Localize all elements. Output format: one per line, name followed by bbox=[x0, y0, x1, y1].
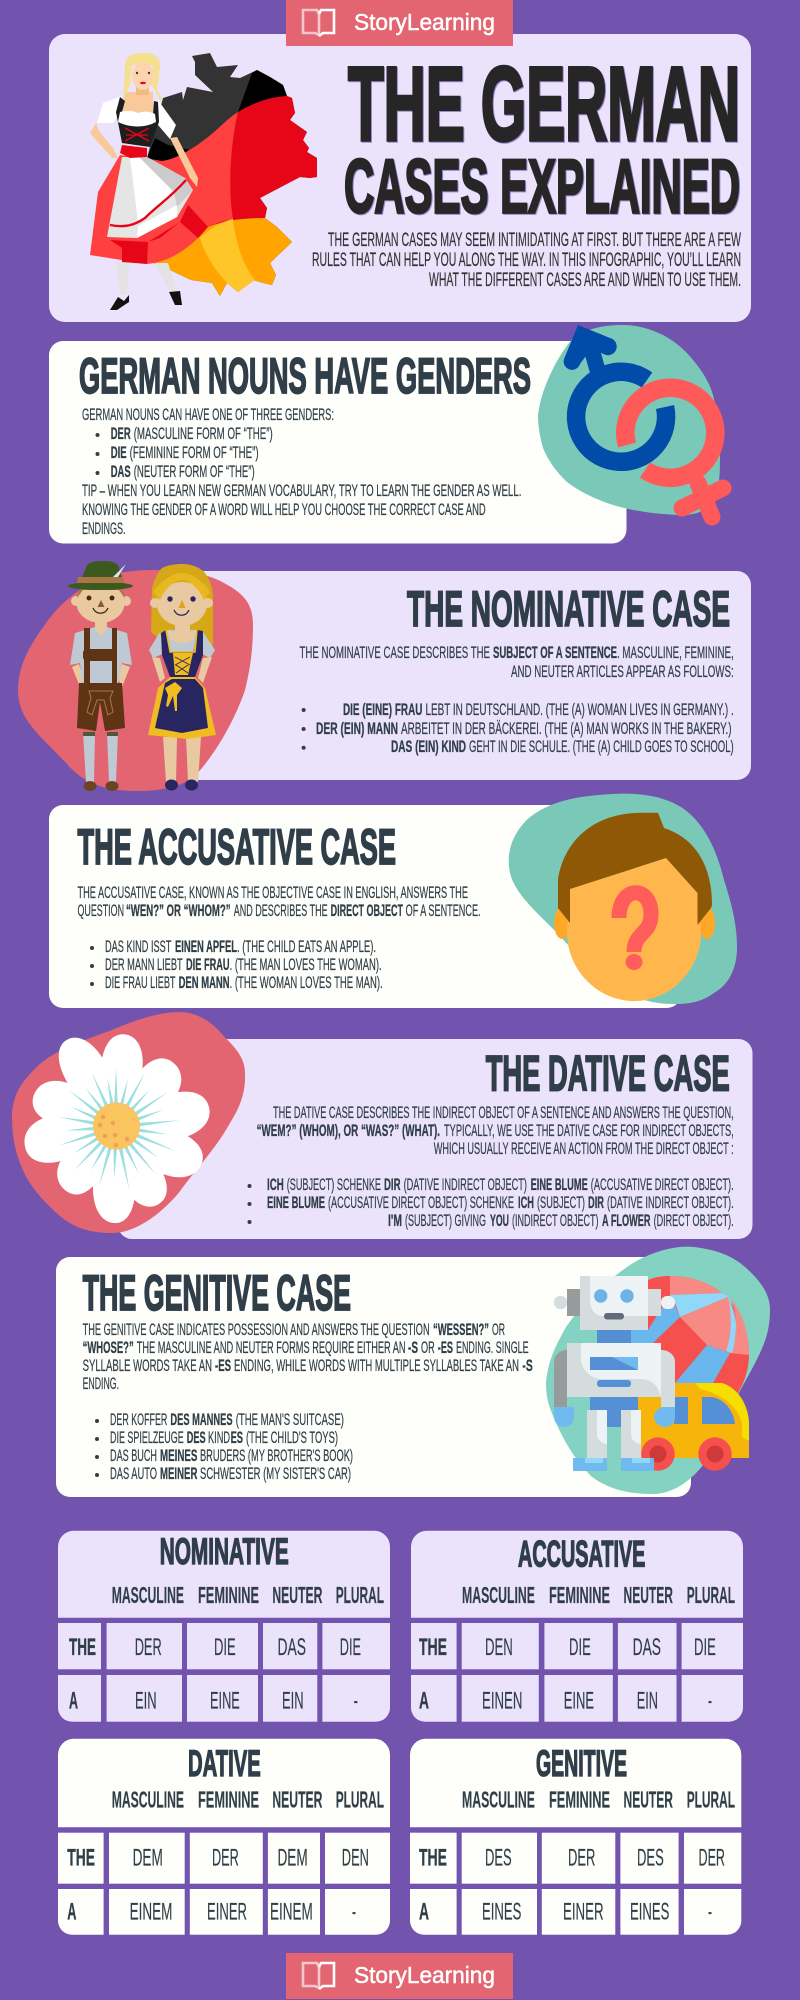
panel: German nouns have genders bbox=[49, 325, 723, 544]
text block: nominative explanation: THE NOMINATIVE CASE DESCRIBES THE bbox=[300, 643, 490, 662]
illustration: woman in dirndl bbox=[90, 53, 208, 310]
table: nominative: EINE bbox=[210, 1688, 240, 1715]
text block: genitive explanation: SCHWESTER (MY SISTER'S CAR) bbox=[200, 1464, 351, 1483]
text block: genitive explanation: BRUDERS (MY BROTHER'S BOOK) bbox=[200, 1446, 353, 1465]
text block: genitive explanation: THE GENITIVE CASE INDICATES POSSESSION AND ANSWERS THE QUESTION bbox=[83, 1320, 430, 1339]
text block: nominative explanation: DIE (EINE) FRAU bbox=[343, 700, 422, 719]
table: dative: - bbox=[352, 1899, 356, 1926]
table: accusative: DEN bbox=[485, 1634, 513, 1661]
icon: faceless head with question mark bbox=[509, 794, 737, 1004]
table: dative: PLURAL bbox=[336, 1787, 384, 1813]
text block: genitive explanation: “WESSEN?” bbox=[433, 1320, 489, 1339]
text block: genitive explanation: ENDING. bbox=[83, 1374, 119, 1393]
table: nominative: MASCULINE bbox=[112, 1582, 184, 1608]
text block: dative explanation: EINE BLUME bbox=[267, 1193, 325, 1212]
table: dative: NEUTER bbox=[272, 1787, 322, 1813]
text block: genitive explanation: MEINER bbox=[160, 1464, 197, 1483]
text block: genitive explanation: OR bbox=[421, 1338, 435, 1357]
text block: genitive explanation: -ES bbox=[438, 1338, 453, 1357]
intro text bbox=[312, 230, 741, 291]
table: genitive: DES bbox=[637, 1845, 664, 1872]
table: nominative: EIN bbox=[282, 1688, 304, 1715]
table: genitive bbox=[410, 1739, 741, 1935]
table: nominative: DER bbox=[135, 1634, 162, 1661]
text block: genders: DAS bbox=[111, 462, 131, 481]
table: genitive: EINES bbox=[630, 1899, 669, 1926]
illustration: couple in traditional dress on red blob bbox=[18, 561, 253, 791]
table: genitive: EINES bbox=[482, 1899, 521, 1926]
icon: open book bbox=[303, 1963, 334, 1989]
text block: dative explanation: YOU bbox=[490, 1211, 509, 1230]
table: accusative: DIE bbox=[694, 1634, 716, 1661]
robot bbox=[554, 1276, 675, 1471]
table: nominative bbox=[58, 1531, 390, 1722]
text block: genitive explanation bbox=[83, 1320, 533, 1483]
table: accusative: - bbox=[708, 1688, 712, 1715]
text block: accusative explanation: DIE FRAU bbox=[186, 955, 230, 974]
logo: StoryLearning bottom bbox=[286, 1953, 513, 1999]
text block: genitive explanation: (THE MAN'S SUITCASE) bbox=[236, 1410, 344, 1429]
table: genitive: THE bbox=[419, 1845, 447, 1872]
woman bbox=[148, 564, 216, 790]
text block: genitive explanation: KIND bbox=[208, 1428, 230, 1447]
text block: dative explanation: (SUBJECT) GIVING bbox=[405, 1211, 486, 1230]
table: nominative: PLURAL bbox=[336, 1582, 384, 1608]
text block: genitive explanation: -S bbox=[522, 1356, 533, 1375]
table: accusative: DAS bbox=[633, 1634, 661, 1661]
text block: nominative explanation: DER (EIN) MANN bbox=[316, 719, 398, 738]
text block: accusative explanation: DAS KIND ISST bbox=[105, 937, 171, 956]
heading: THE ACCUSATIVE CASE bbox=[78, 819, 396, 875]
text block: accusative explanation: OF A SENTENCE. bbox=[406, 901, 481, 920]
text block: genitive explanation: DES MANNES bbox=[170, 1410, 233, 1429]
panel: genitive case bbox=[56, 1247, 770, 1497]
text block: accusative explanation: DIE FRAU LIEBT bbox=[105, 973, 176, 992]
text block: dative explanation: (DIRECT OBJECT). bbox=[654, 1211, 734, 1230]
title bbox=[344, 46, 740, 230]
table: accusative: DIE bbox=[569, 1634, 591, 1661]
table: nominative: THE bbox=[69, 1634, 96, 1661]
table: accusative: THE bbox=[419, 1634, 447, 1661]
table: genitive: DES bbox=[485, 1845, 512, 1872]
table: accusative: PLURAL bbox=[687, 1582, 735, 1608]
text block: genitive explanation: THE MASCULINE AND NEUTER FORMS REQUIRE EITHER AN bbox=[137, 1338, 406, 1357]
text block: accusative explanation: DIRECT OBJECT bbox=[331, 901, 403, 920]
table: accusative: EIN bbox=[637, 1688, 658, 1715]
table: dative: DEN bbox=[342, 1845, 369, 1872]
text block: accusative explanation: EINEN APFEL bbox=[175, 937, 237, 956]
table: nominative: NEUTER bbox=[272, 1582, 322, 1608]
table: dative: DER bbox=[212, 1845, 239, 1872]
text block: genitive explanation: ES bbox=[231, 1428, 243, 1447]
table: nominative: FEMININE bbox=[198, 1582, 259, 1608]
table: dative: EINEM bbox=[270, 1899, 313, 1926]
table: accusative: FEMININE bbox=[549, 1582, 610, 1608]
table: genitive: - bbox=[708, 1899, 712, 1926]
table: accusative: A bbox=[419, 1688, 429, 1715]
text block: accusative explanation: . (THE MAN LOVES THE WOMAN). bbox=[230, 955, 382, 974]
text block: genders bbox=[82, 405, 521, 538]
table: genitive: MASCULINE bbox=[462, 1787, 535, 1813]
table: nominative: - bbox=[354, 1688, 358, 1715]
table: genitive: GENITIVE bbox=[536, 1743, 627, 1784]
table: accusative: NEUTER bbox=[624, 1582, 673, 1608]
panel: accusative case bbox=[49, 794, 737, 1008]
text block: genitive explanation: (THE CHILD'S TOYS) bbox=[246, 1428, 338, 1447]
ball bbox=[631, 1276, 749, 1397]
text block: genitive explanation: SYLLABLE WORDS TAKE AN bbox=[83, 1356, 212, 1375]
text block: dative explanation: (SUBJECT) bbox=[537, 1193, 585, 1212]
text block: genitive explanation: -S bbox=[408, 1338, 418, 1357]
table: genitive: FEMININE bbox=[549, 1787, 610, 1813]
table: accusative: EINEN bbox=[482, 1688, 522, 1715]
table: dative: FEMININE bbox=[198, 1787, 259, 1813]
table: dative: A bbox=[67, 1899, 76, 1926]
text block: accusative explanation: QUESTION bbox=[78, 901, 124, 920]
text block: accusative explanation: DEN MANN bbox=[179, 973, 230, 992]
car bbox=[638, 1383, 749, 1471]
table: nominative: NOMINATIVE bbox=[160, 1531, 289, 1572]
heading: THE GENITIVE CASE bbox=[83, 1265, 351, 1321]
text block: genitive explanation: ENDING, WHILE WORDS WITH MULTIPLE SYLLABLES TAKE AN bbox=[234, 1356, 519, 1375]
text block: genders: DIE bbox=[111, 443, 127, 462]
logo: StoryLearning top: StoryLearning bbox=[354, 9, 495, 35]
text block: genders: ENDINGS. bbox=[82, 519, 126, 538]
text block: dative explanation: (ACCUSATIVE DIRECT OBJECT) SCHENKE bbox=[328, 1193, 514, 1212]
illustration: robot, ball and toy car on teal blob bbox=[546, 1247, 770, 1494]
text block: accusative explanation: . (THE CHILD EATS AN APPLE). bbox=[237, 937, 376, 956]
table: accusative: MASCULINE bbox=[462, 1582, 535, 1608]
text block: dative explanation bbox=[248, 1103, 734, 1230]
text block: dative explanation: I'M bbox=[388, 1211, 402, 1230]
text block: genitive explanation: “WHOSE?” bbox=[83, 1338, 134, 1357]
panel: dative case bbox=[118, 1039, 752, 1239]
text block: dative explanation: A FLOWER bbox=[602, 1211, 650, 1230]
table: dative: DEM bbox=[278, 1845, 308, 1872]
table: genitive: PLURAL bbox=[687, 1787, 735, 1813]
table: nominative: DIE bbox=[214, 1634, 236, 1661]
illustration: daisy on red blob bbox=[12, 1012, 245, 1233]
text block: nominative explanation: SUBJECT OF A SENTENCE bbox=[493, 643, 617, 662]
text block: accusative explanation bbox=[78, 883, 481, 992]
table: nominative: A bbox=[69, 1688, 78, 1715]
text block: dative explanation: (INDIRECT OBJECT) bbox=[512, 1211, 598, 1230]
table: genitive: NEUTER bbox=[624, 1787, 673, 1813]
text block: dative explanation: ICH bbox=[518, 1193, 534, 1212]
table: genitive: A bbox=[419, 1899, 429, 1926]
text block: genitive explanation: DAS BUCH bbox=[110, 1446, 157, 1465]
text block: accusative explanation: . (THE WOMAN LOVES THE MAN). bbox=[230, 973, 383, 992]
logo: StoryLearning bottom: StoryLearning bbox=[354, 1962, 495, 1988]
table: genitive: DER bbox=[698, 1845, 725, 1872]
text block: genders: KNOWING THE GENDER OF A WORD WILL HELP YOU CHOOSE THE CORRECT CASE AND bbox=[82, 500, 486, 519]
panel: introduction bbox=[49, 34, 751, 322]
text block: genders: (NEUTER FORM OF “THE”) bbox=[134, 462, 255, 481]
table: nominative: EIN bbox=[135, 1688, 157, 1715]
text block: genders: (MASCULINE FORM OF “THE”) bbox=[134, 424, 273, 443]
table: dative: DEM bbox=[133, 1845, 163, 1872]
table: dative: EINER bbox=[207, 1899, 247, 1926]
table: genitive: DER bbox=[568, 1845, 595, 1872]
table: accusative bbox=[411, 1531, 743, 1722]
table: dative: THE bbox=[67, 1845, 95, 1872]
text block: accusative explanation: THE ACCUSATIVE CASE, KNOWN AS THE OBJECTIVE CASE IN ENGLISH, ANSWERS THE bbox=[78, 883, 468, 902]
text block: dative explanation: (DATIVE INDIRECT OBJECT) bbox=[404, 1175, 527, 1194]
text block: accusative explanation: “WEN?” OR “WHOM?” bbox=[126, 901, 231, 920]
text block: dative explanation: DIR bbox=[384, 1175, 400, 1194]
text block: genitive explanation: DES bbox=[187, 1428, 206, 1447]
text block: accusative explanation: AND DESCRIBES THE bbox=[234, 901, 328, 920]
text block: genitive explanation: DIE SPIELZEUGE bbox=[110, 1428, 184, 1447]
text block: genitive explanation: ENDING. SINGLE bbox=[456, 1338, 529, 1357]
text block: genitive explanation: DAS AUTO bbox=[110, 1464, 157, 1483]
text block: genitive explanation: DER KOFFER bbox=[110, 1410, 167, 1429]
text block: dative explanation: (SUBJECT) SCHENKE bbox=[287, 1175, 381, 1194]
text block: nominative explanation bbox=[300, 643, 734, 756]
icon: open book bbox=[303, 10, 334, 36]
panel: nominative case bbox=[150, 571, 751, 780]
text block: genitive explanation: OR bbox=[492, 1320, 505, 1339]
text block: dative explanation: ICH bbox=[267, 1175, 284, 1194]
table: dative: EINEM bbox=[130, 1899, 172, 1926]
text block: dative explanation: DIR bbox=[588, 1193, 604, 1212]
table: dative bbox=[58, 1739, 390, 1935]
table: nominative: DIE bbox=[340, 1634, 361, 1661]
text block: dative explanation: EINE BLUME bbox=[531, 1175, 588, 1194]
icon: gender symbols on teal blob bbox=[538, 325, 723, 517]
logo: StoryLearning top bbox=[286, 0, 513, 46]
text block: genitive explanation: MEINES bbox=[160, 1446, 197, 1465]
text block: accusative explanation: DER MANN LIEBT bbox=[105, 955, 183, 974]
text block: nominative explanation: DAS (EIN) KIND bbox=[391, 737, 466, 756]
table: nominative: DAS bbox=[278, 1634, 306, 1661]
text block: dative explanation: “WEM?” (WHOM), OR “WAS?” (WHAT). bbox=[257, 1121, 440, 1140]
illustration: Germany map in flag colours bbox=[130, 53, 317, 296]
man bbox=[68, 561, 133, 791]
table: accusative: EINE bbox=[564, 1688, 594, 1715]
text block: genders: (FEMININE FORM OF “THE”) bbox=[130, 443, 259, 462]
table: genitive: EINER bbox=[563, 1899, 604, 1926]
table: dative: DATIVE bbox=[188, 1743, 261, 1784]
table: accusative: ACCUSATIVE bbox=[518, 1534, 645, 1575]
text block: genitive explanation: -ES bbox=[215, 1356, 231, 1375]
text block: genders: GERMAN NOUNS CAN HAVE ONE OF THREE GENDERS: bbox=[82, 405, 334, 424]
table: dative: MASCULINE bbox=[112, 1787, 184, 1813]
text block: genders: DER bbox=[111, 424, 131, 443]
